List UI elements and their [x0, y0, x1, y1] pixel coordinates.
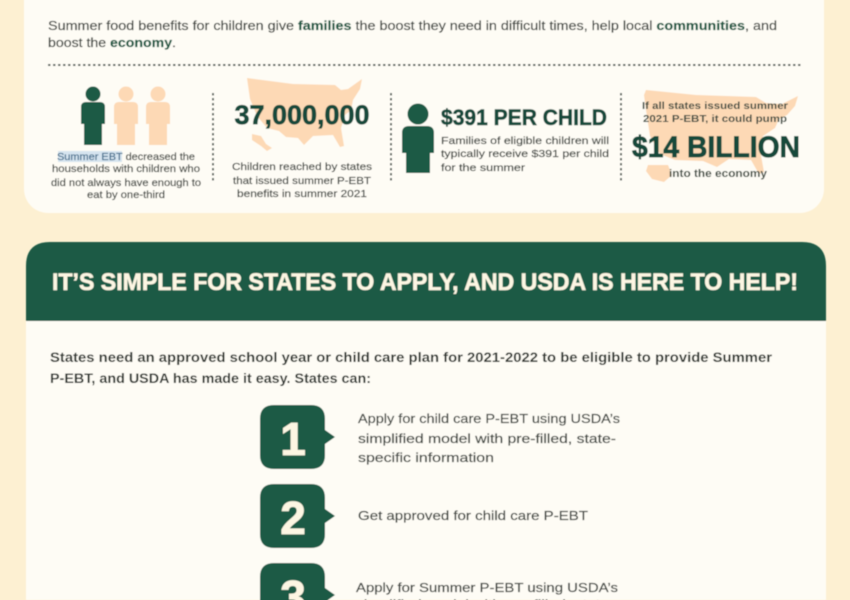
caption: benefits in summer 2021	[237, 188, 367, 200]
badge 2	[260, 484, 335, 548]
step text: Get approved for child care P-EBT	[358, 508, 588, 523]
badge 1: 1	[280, 413, 306, 465]
step 2	[260, 484, 588, 548]
caption: typically receive $391 per child	[441, 148, 609, 160]
caption: Summer EBT decreased the	[57, 151, 195, 163]
step text	[358, 411, 621, 465]
lead-in	[642, 100, 788, 125]
intro paragraph: boost the economy .	[48, 35, 176, 50]
panel: benefits	[24, 0, 824, 213]
lead-in: If all states issued summer	[642, 100, 788, 112]
intro paragraph	[48, 18, 777, 50]
caption: for the summer	[441, 162, 526, 174]
icon: US map	[644, 90, 798, 182]
caption: eat by one-third	[87, 189, 165, 201]
badge 2: 2	[280, 492, 306, 544]
caption	[51, 151, 201, 201]
big number: 37,000,000	[234, 100, 370, 130]
caption	[232, 161, 372, 200]
caption: Children reached by states	[232, 161, 372, 173]
badge 1	[260, 405, 335, 469]
caption	[441, 135, 609, 174]
intro paragraph: Summer food benefits for children give families the boost they need in difficult times, help local communities , and	[48, 18, 777, 33]
panel: how to apply	[26, 242, 826, 600]
header banner	[26, 242, 826, 321]
icon: US map	[247, 78, 362, 151]
step text: Apply for child care P-EBT using USDA’s	[358, 411, 621, 426]
step text	[356, 580, 619, 600]
caption: Families of eligible children will	[441, 135, 609, 147]
stat: one third	[51, 86, 201, 201]
heading: IT’S SIMPLE FOR STATES TO APPLY, AND USDA IS HERE TO HELP!	[52, 269, 798, 296]
step text: Apply for Summer P-EBT using USDA’s	[356, 580, 619, 595]
step text: specific information	[358, 450, 494, 465]
icon: person	[402, 104, 434, 173]
badge 3	[260, 563, 335, 600]
icon: three people	[81, 86, 170, 145]
stat: 14 billion	[632, 90, 800, 182]
step 1	[260, 405, 621, 469]
stat: 37 million children	[232, 78, 372, 200]
big number: $14 BILLION	[632, 131, 800, 164]
step text: simplified model with pre-filled, state-	[358, 431, 616, 446]
caption: that issued summer P-EBT	[233, 175, 372, 187]
eligibility paragraph: P-EBT, and USDA has made it easy. States can:	[50, 371, 371, 386]
eligibility paragraph: States need an approved school year or child care plan for 2021-2022 to be eligible to provide Summer	[50, 350, 773, 365]
step 3	[260, 563, 619, 600]
lead-in: 2021 P-EBT, it could pump	[643, 113, 787, 125]
caption: into the economy	[669, 168, 768, 180]
heading: $391 PER CHILD	[441, 105, 607, 130]
stat: per child	[402, 104, 609, 174]
caption: households with children who	[52, 163, 200, 175]
eligibility paragraph	[50, 350, 773, 386]
caption: did not always have enough to	[51, 177, 201, 189]
